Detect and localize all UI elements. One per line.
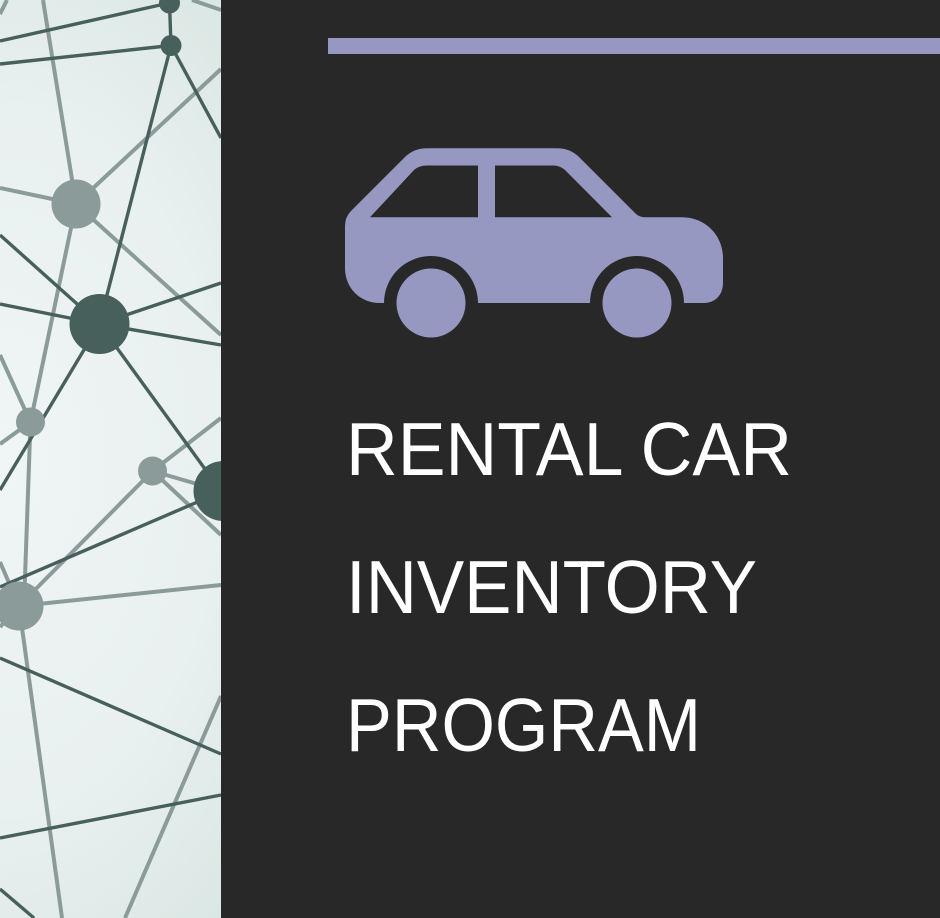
title <box>346 407 792 767</box>
network nodes: light <box>0 180 167 630</box>
title: INVENTORY <box>346 545 757 629</box>
panel: dark content area <box>221 0 940 918</box>
panel: network background <box>0 0 254 918</box>
network lines: light <box>0 0 221 918</box>
accent bar <box>328 38 940 54</box>
network nodes: dark <box>70 0 254 521</box>
title: RENTAL CAR <box>346 407 792 491</box>
network lines: dark <box>0 3 223 918</box>
title: PROGRAM <box>346 683 701 767</box>
icon: car <box>345 148 723 338</box>
